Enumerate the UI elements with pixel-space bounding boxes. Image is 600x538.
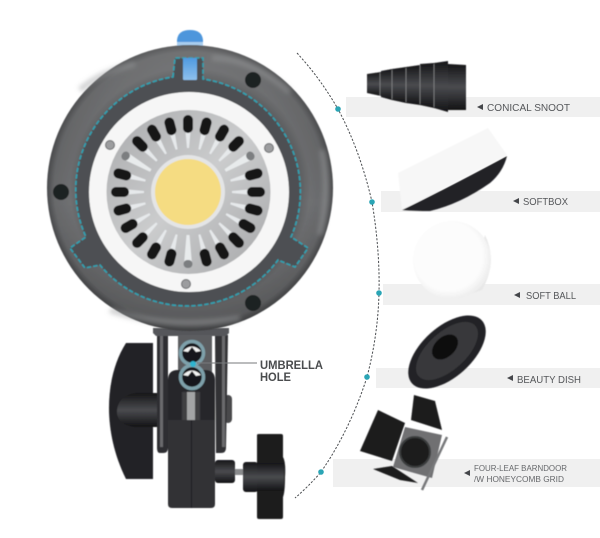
umbrella hole callout: HOLE [260,372,291,384]
housing facets [80,58,326,322]
label: beauty dish: BEAUTY DISH [517,375,581,386]
yellow LED [155,159,221,225]
silver LED collar [151,155,225,229]
label bar: softbox [381,191,600,212]
light head [47,30,333,331]
umbrella hole callout: UMBRELLA [260,360,323,372]
label: conical snoot: CONICAL SNOOT [487,103,570,114]
accessory: beauty dish [395,302,499,402]
disc screws [106,140,274,288]
node dots [318,106,382,475]
snoot ridges [380,64,434,107]
accessory: softbox [398,128,507,211]
accessory: four-leaf barndoor [360,395,447,490]
label: four-leaf barndoor with honeycomb grid: FOUR-LEAF BARNDOOR [474,463,567,473]
blue release button [177,30,203,47]
teal stitched outline [70,58,308,306]
vent slots [111,115,265,268]
side tilt knob [215,434,285,519]
right fork stud [224,395,232,423]
top plate [153,328,229,336]
accessory: conical snoot [367,61,466,112]
umbrella hole callout [197,360,323,384]
vent disc [106,110,270,274]
mount bracket and knobs [109,328,285,519]
label bar: beauty dish [376,368,600,388]
fork arms [157,335,228,453]
accessory: soft ball [413,221,491,299]
main clamp body [168,420,215,508]
inner recessed channel [70,58,308,306]
blue lock slider [183,58,197,80]
big locking knob [109,343,162,479]
housing screws [53,72,261,311]
label: four-leaf barndoor with honeycomb grid [464,463,567,484]
label: softbox: SOFTBOX [523,197,568,208]
label: four-leaf barndoor with honeycomb grid: /W HONEYCOMB GRID [474,474,564,484]
outer housing [47,45,333,331]
dotted arc connector [295,53,382,498]
label: soft ball: SOFT BALL [526,291,576,302]
label bar: conical snoot [346,97,600,117]
white reflector ring [89,92,289,292]
umbrella hole mount [168,335,215,422]
label bar: soft ball [383,284,600,305]
label bar: barndoor [333,459,600,487]
